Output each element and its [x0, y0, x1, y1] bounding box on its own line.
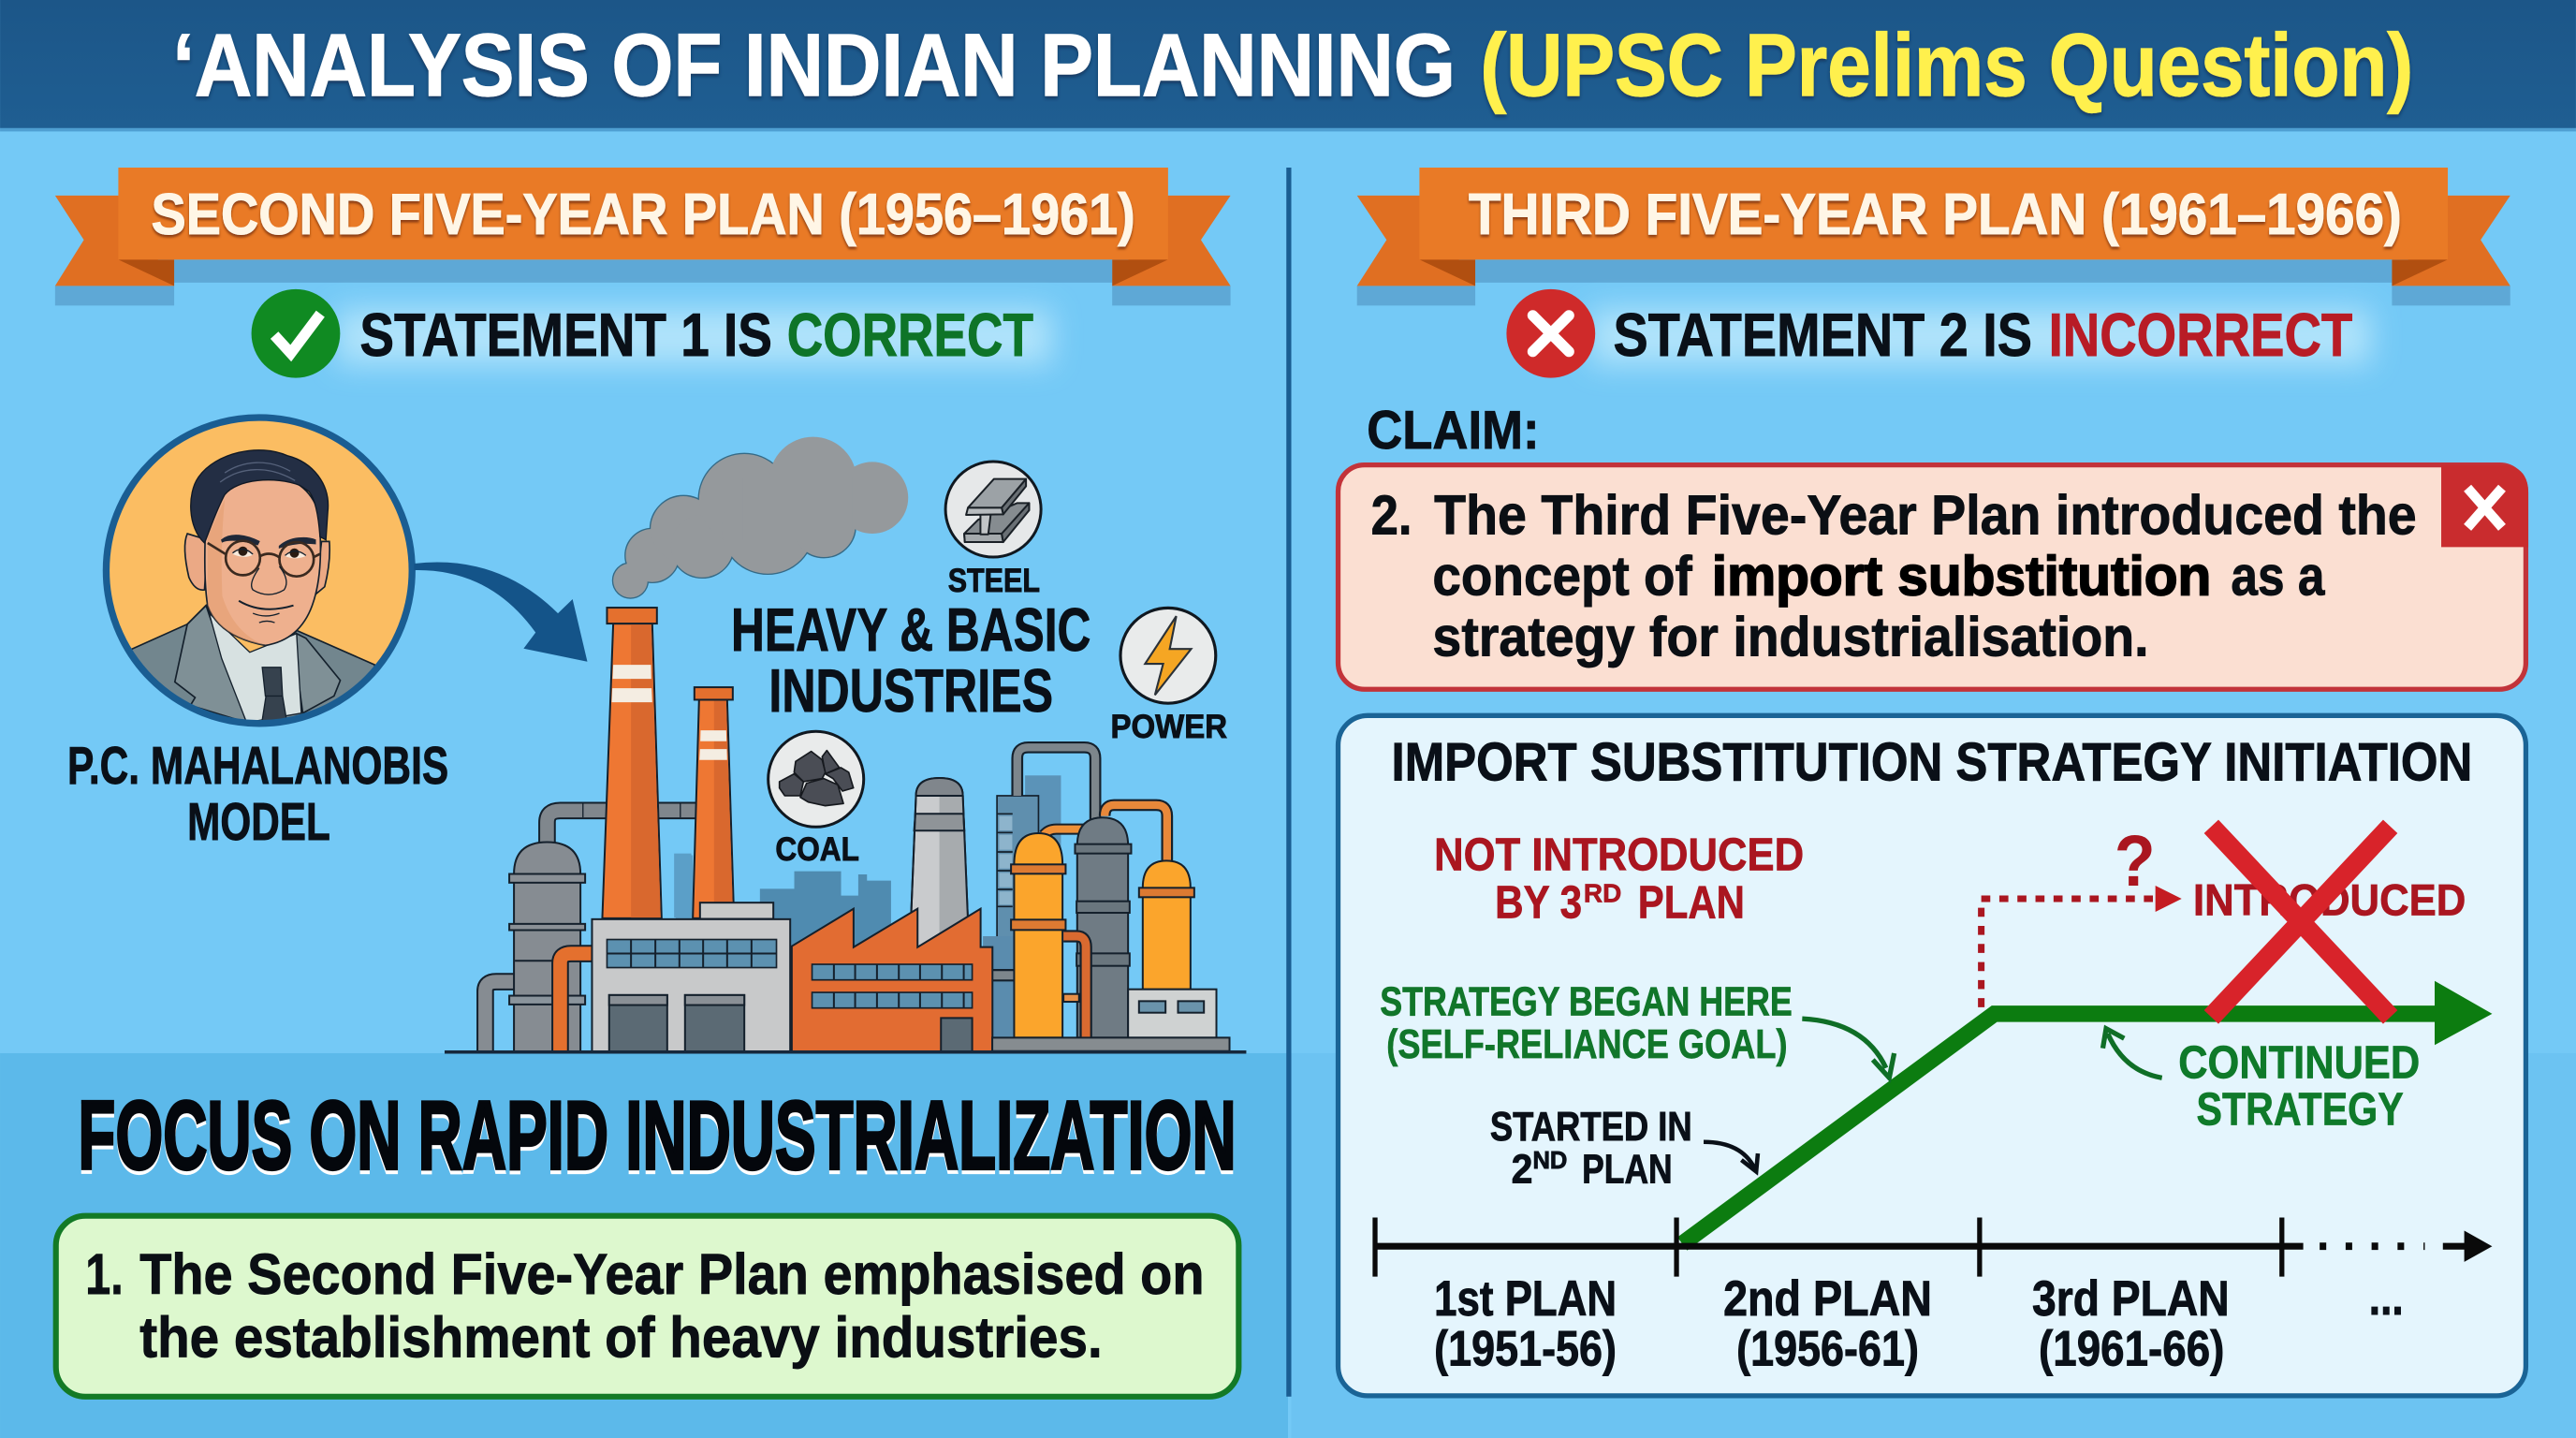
claim box: The Third Five-Year Plan introduced the	[1434, 483, 2417, 546]
refinery tanks	[992, 817, 1230, 1051]
claim box: concept of	[1432, 544, 1692, 607]
orange connector pipes	[1063, 936, 1086, 1037]
statement box 1	[56, 1216, 1238, 1397]
short chimney	[693, 687, 734, 918]
claim box: import substitution	[1712, 544, 2211, 607]
green strategy line	[1682, 981, 2492, 1244]
column divider	[1286, 168, 1292, 1397]
icon: x badge	[2441, 465, 2528, 547]
portrait: P.C. Mahalanobis	[106, 418, 412, 733]
label: P.C. Mahalanobis model: P.C. MAHALANOBIS	[67, 736, 448, 795]
orange sawtooth building	[792, 909, 992, 1051]
callout: continued strategy	[2178, 1037, 2420, 1135]
control box	[992, 990, 1230, 1051]
main building	[592, 902, 790, 1052]
panel: second five-year plan	[55, 168, 1246, 1397]
callout: strategy began here: STRATEGY BEGAN HERE	[1380, 979, 1793, 1025]
callout: continued strategy: STRATEGY	[2197, 1084, 2404, 1135]
verdict: statement 2 incorrect: INCORRECT	[2049, 301, 2352, 369]
gray tank	[1075, 817, 1131, 1037]
title banner: ‘ANALYSIS OF INDIAN PLANNING	[172, 16, 1456, 115]
timeline labels: ...	[2369, 1270, 2404, 1326]
orange tank	[1011, 833, 1065, 1037]
smoke cloud	[613, 437, 908, 597]
callout: started in 2nd plan: STARTED IN	[1490, 1104, 1692, 1150]
factory illustration	[445, 608, 1246, 1053]
label: coal: COAL	[775, 831, 859, 868]
label: power: POWER	[1110, 709, 1227, 745]
dotted red path with question mark: ?	[2115, 821, 2156, 902]
label: steel: STEEL	[948, 563, 1040, 599]
timeline labels: (1961-66)	[2039, 1321, 2224, 1376]
curved arrow: began here	[1802, 1019, 1895, 1078]
timeline labels: 1st PLAN	[1434, 1271, 1617, 1327]
ribbon: third plan	[1357, 168, 2510, 305]
claim box: 2.	[1371, 483, 1412, 546]
curved arrow: started in	[1704, 1142, 1758, 1171]
timeline axis	[1375, 1217, 2492, 1277]
verdict: statement 1 correct: CORRECT	[787, 301, 1033, 369]
icon: power bolt	[1120, 608, 1216, 703]
verdict: statement 2 incorrect	[1506, 289, 2371, 378]
timeline labels	[1434, 1270, 2404, 1376]
callout: strategy began here: (SELF-RELIANCE GOAL)	[1386, 1021, 1788, 1067]
heading: heavy and basic industries	[731, 595, 1090, 725]
left plant: tank, chimneys, main building	[485, 608, 790, 1052]
callout: not introduced	[1434, 829, 1804, 928]
verdict: statement 1 correct	[252, 289, 1051, 378]
heading: focus on rapid industrialization: FOCUS ON RAPID INDUSTRIALIZATION	[78, 1081, 1237, 1190]
ribbon: third plan: THIRD FIVE-YEAR PLAN (1961–1966)	[1469, 183, 2402, 247]
background skyline	[674, 854, 891, 948]
right orange tank	[1139, 860, 1194, 990]
tall chimney	[602, 608, 662, 918]
statement box 1: the establishment of heavy industries.	[139, 1306, 1103, 1371]
timeline labels: 3rd PLAN	[2032, 1271, 2230, 1327]
statement box 1: The Second Five-Year Plan emphasised on	[139, 1242, 1204, 1307]
statement box 1: 1.	[85, 1242, 124, 1307]
callout: not introduced: NOT INTRODUCED	[1434, 829, 1804, 880]
red cross mark	[2211, 827, 2391, 1017]
claim box: strategy for industrialisation.	[1432, 605, 2149, 668]
heading: heavy and basic industries: HEAVY & BASIC	[731, 595, 1090, 664]
curved arrow: continued	[2102, 1029, 2162, 1078]
callout: not introduced: RD	[1584, 879, 1621, 908]
callout: started in 2nd plan: ND	[1532, 1146, 1567, 1174]
callout: not introduced: PLAN	[1638, 877, 1745, 928]
verdict: statement 2 incorrect: STATEMENT 2 IS	[1613, 301, 2032, 369]
timeline labels: 2nd PLAN	[1723, 1271, 1932, 1327]
title banner: (UPSC Prelims Question)	[1480, 16, 2413, 115]
grey stack	[910, 778, 969, 948]
icon: coal	[768, 731, 864, 827]
label: P.C. Mahalanobis model: MODEL	[187, 792, 330, 851]
ribbon: second plan	[55, 168, 1231, 305]
callout: started in 2nd plan: 2	[1512, 1147, 1532, 1193]
heading: focus on rapid industrialization: FOCUS ON RAPID INDUSTRIALIZATION	[78, 1085, 1237, 1194]
ribbon: second plan: SECOND FIVE-YEAR PLAN (1956–1961)	[152, 183, 1135, 247]
verdict: statement 1 correct: STATEMENT 1 IS	[359, 301, 772, 369]
timeline labels: (1956-61)	[1736, 1321, 1919, 1376]
label: introduced, crossed out: INTRODUCED	[2193, 876, 2466, 926]
callout: continued strategy: CONTINUED	[2178, 1037, 2420, 1088]
callout: strategy began here	[1380, 979, 1793, 1067]
callout: started in 2nd plan: PLAN	[1582, 1147, 1673, 1193]
label: claim: CLAIM:	[1367, 401, 1540, 461]
title banner	[0, 0, 2576, 131]
dotted red path with question mark	[1982, 821, 2182, 1007]
claim box	[1339, 465, 2528, 689]
panel: third five-year plan	[1339, 168, 2528, 1396]
icon: steel beam	[945, 462, 1041, 557]
claim box: as a	[2231, 544, 2325, 607]
grey tank	[509, 842, 585, 1052]
chart panel: import substitution timeline	[1339, 715, 2525, 1396]
arrow: model to factory	[414, 562, 587, 662]
timeline labels: (1951-56)	[1434, 1321, 1617, 1376]
callout: not introduced: BY 3	[1495, 877, 1582, 928]
label: P.C. Mahalanobis model	[67, 736, 448, 851]
ground line	[445, 1050, 1246, 1053]
refinery background and pipes	[983, 747, 1167, 1037]
callout: started in 2nd plan	[1490, 1104, 1692, 1193]
connecting pipes	[485, 803, 699, 1052]
heading: focus on rapid industrialization	[78, 1081, 1237, 1194]
heading: heavy and basic industries: INDUSTRIES	[768, 656, 1053, 725]
stack and sawtooth factory	[792, 778, 992, 1051]
orange pipe	[560, 954, 593, 1052]
